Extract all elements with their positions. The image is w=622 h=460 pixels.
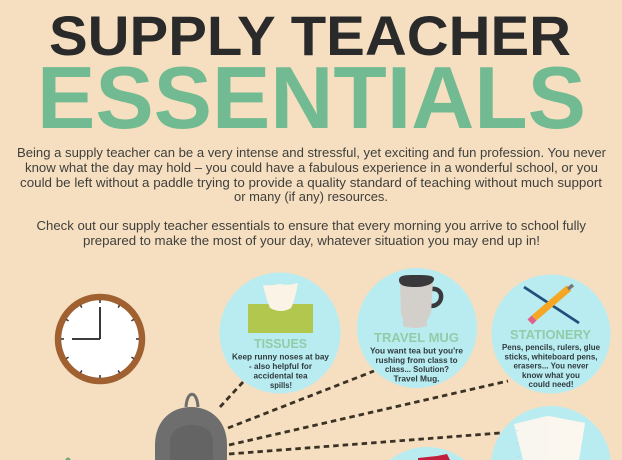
connector lines (220, 371, 508, 454)
text: travel mug description: class... Solution? (385, 365, 449, 374)
text: travel mug description (370, 346, 464, 384)
icon: tissue box (248, 283, 313, 333)
intro paragraph: know what the day may hold – you could have a fabulous experience in a wonderful school, or you (25, 161, 598, 175)
plant tip (66, 458, 70, 460)
heading: tissues: TISSUES (254, 336, 307, 351)
call to action paragraph (36, 219, 587, 248)
text: stationery description: sticks, whiteboard pens, (504, 352, 598, 362)
intro paragraph: Being a supply teacher can be a very intense and stressful, yet exciting and fun profession. You never (17, 146, 606, 160)
panel: stationery (492, 274, 610, 394)
text: stationery description: could need! (528, 380, 574, 389)
icon: paper sheets (514, 416, 585, 460)
text: travel mug description: Travel Mug. (394, 374, 440, 384)
text: tissues description: spills! (270, 381, 292, 390)
text: travel mug description: rushing from class to (376, 356, 458, 365)
icon: backpack (155, 394, 227, 460)
text: stationery description (502, 343, 601, 389)
icon: mug (399, 275, 441, 328)
text: stationery description: know what you (522, 371, 580, 380)
intro paragraph: could be left without a paddle trying to provide a quality standard of teaching without much support (20, 176, 603, 190)
text: tissues description: Keep runny noses at bay (232, 352, 330, 362)
panel: paper (491, 406, 611, 460)
intro paragraph: or many (if any) resources. (234, 190, 388, 204)
call to action paragraph: prepared to make the most of your day, whatever situation you may end up in! (83, 234, 540, 248)
icon: pen and pencil (524, 285, 579, 323)
panel: red item (367, 447, 487, 460)
icon: red item (418, 454, 450, 460)
intro paragraph (17, 146, 606, 204)
heading: stationery: STATIONERY (510, 327, 591, 342)
call to action paragraph: Check out our supply teacher essentials to ensure that every morning you arrive to school fully (36, 219, 587, 233)
text: tissues description: - also helpful for (249, 362, 312, 371)
text: tissues description (232, 352, 330, 390)
text: tissues description: accidental tea (254, 372, 308, 380)
text: stationery description: erasers... You never (514, 362, 588, 370)
text: travel mug description: You want tea but you're (370, 346, 464, 356)
text: stationery description: Pens, pencils, rulers, glue (502, 343, 601, 352)
heading: travel mug: TRAVEL MUG (374, 330, 459, 345)
title: supply teacher: SUPPLY TEACHER (49, 4, 571, 67)
icon: wall clock (58, 297, 142, 381)
panel: travel mug (357, 268, 477, 388)
panel: tissues (220, 272, 340, 394)
title: essentials: ESSENTIALS (37, 48, 586, 147)
